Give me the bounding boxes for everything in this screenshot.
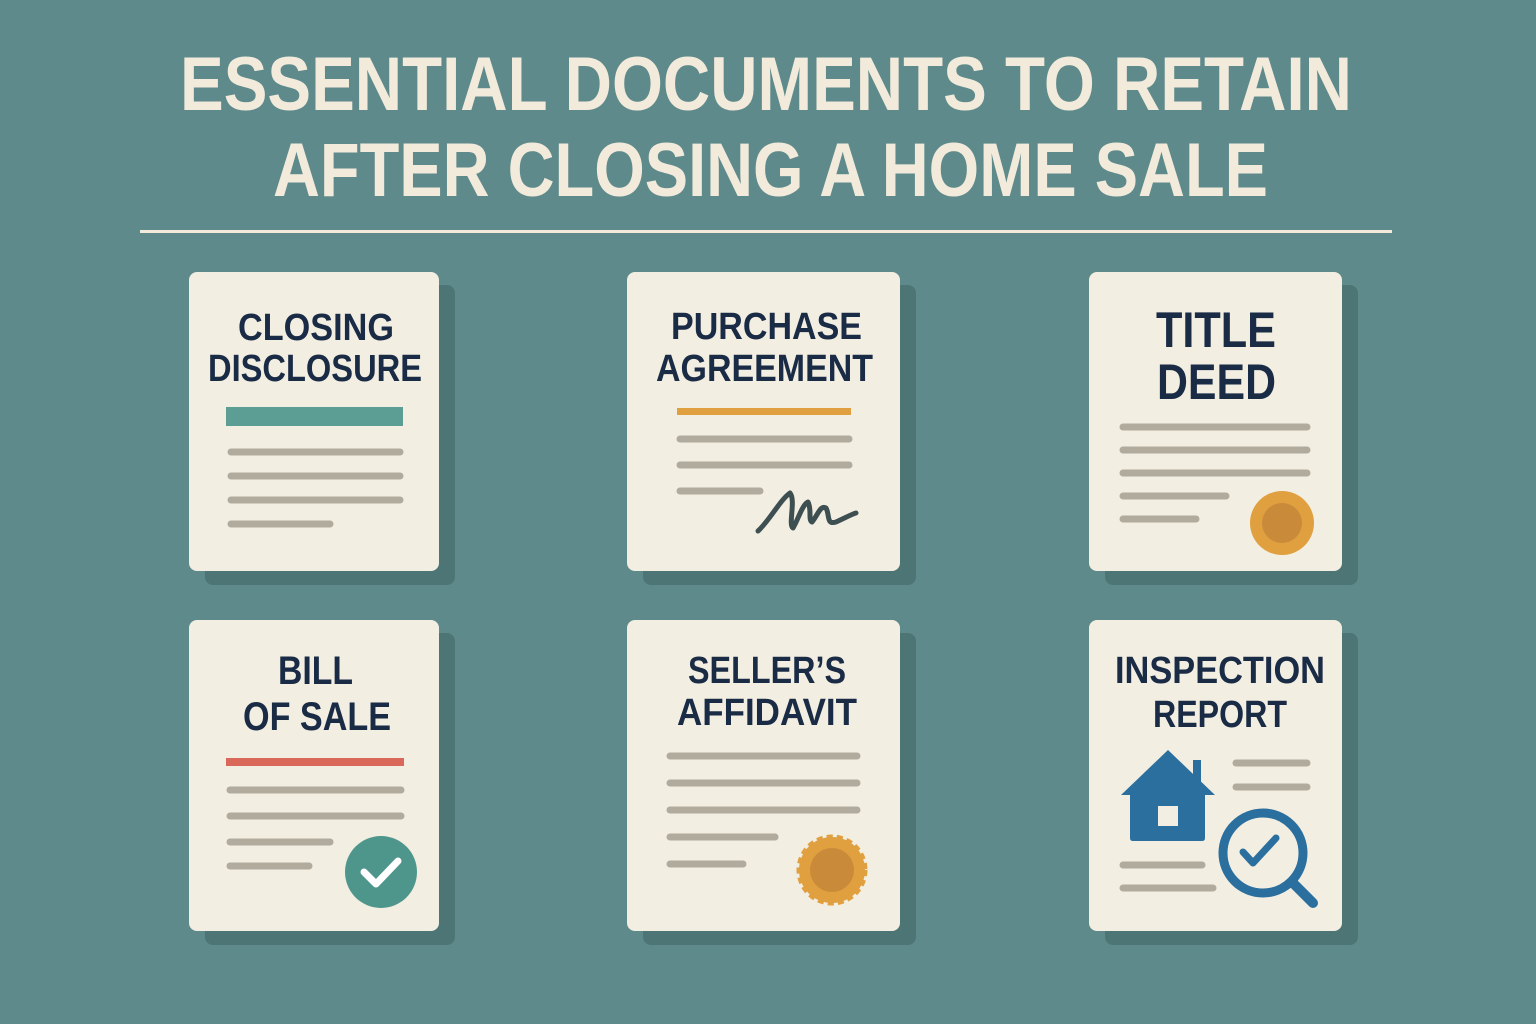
title: AFTER CLOSING A HOME SALE — [273, 128, 1268, 213]
card: inspection report: INSPECTION — [1115, 650, 1325, 692]
icon: signature — [758, 493, 856, 531]
card: purchase agreement — [627, 272, 916, 585]
card: seller's affidavit — [627, 620, 916, 945]
card: title deed: DEED — [1157, 354, 1276, 410]
card: purchase agreement: AGREEMENT — [656, 348, 873, 390]
title — [180, 42, 1352, 213]
card: purchase agreement: PURCHASE — [671, 306, 862, 348]
card: title deed — [1089, 272, 1358, 585]
card: bill of sale: BILL — [278, 649, 353, 693]
card: seller's affidavit: AFFIDAVIT — [677, 692, 857, 734]
icon: house — [1121, 750, 1215, 841]
card: seller's affidavit: SELLER’S — [688, 650, 846, 692]
title: ESSENTIAL DOCUMENTS TO RETAIN — [180, 42, 1352, 127]
card: closing disclosure: CLOSING — [238, 307, 394, 349]
card: closing disclosure: DISCLOSURE — [208, 348, 422, 390]
card: inspection report: REPORT — [1153, 694, 1287, 736]
icon: magnifier with check — [1223, 813, 1313, 903]
card: closing disclosure — [189, 272, 455, 585]
icon: wax seal — [799, 837, 865, 903]
icon: check circle — [345, 836, 417, 908]
card: inspection report — [1089, 620, 1358, 945]
card: title deed: TITLE — [1156, 302, 1276, 358]
icon: seal — [1250, 491, 1314, 555]
card: bill of sale — [189, 620, 455, 945]
card: bill of sale: OF SALE — [243, 695, 391, 739]
